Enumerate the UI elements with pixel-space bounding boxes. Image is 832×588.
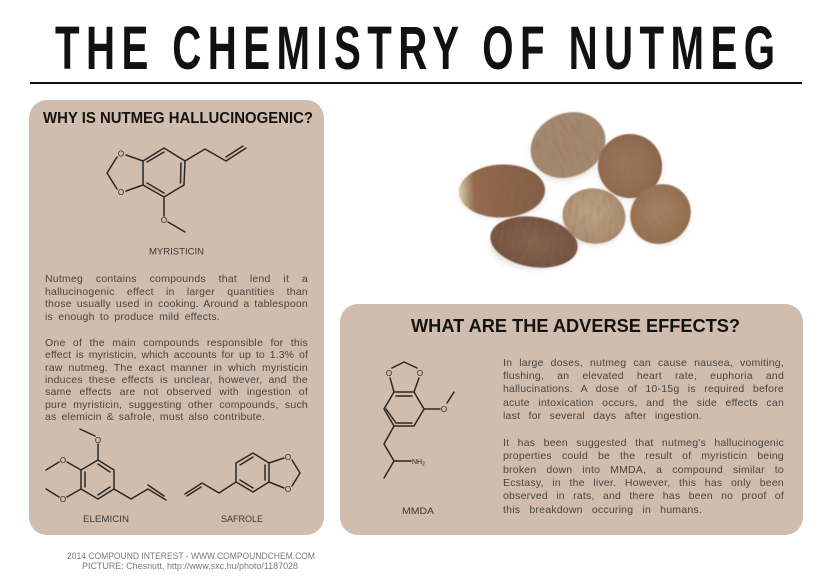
text block: compounds paragraph: One of the main compounds responsible for this — [45, 336, 308, 348]
text block: intro paragraph: those usually used in cooking. Around a tablespoon — [45, 298, 308, 310]
text block: MMDA paragraph: properties could be the result of myristicin being — [503, 450, 784, 462]
text block: compounds paragraph: effect is myristicin, which accounts for up to 1.3% of — [45, 349, 308, 361]
text block: intro paragraph — [45, 272, 311, 324]
molecule: safrole — [185, 453, 300, 496]
title rule — [30, 82, 802, 84]
text block: MMDA paragraph — [503, 436, 787, 518]
molecule: elemicin: O — [60, 456, 66, 465]
text block: compounds paragraph — [45, 336, 311, 426]
nut: lower right — [618, 172, 703, 256]
title: THE CHEMISTRY OF NUTMEG — [55, 14, 775, 82]
molecule: myristicin: O — [118, 188, 124, 197]
panel background — [340, 304, 803, 535]
molecule: elemicin — [46, 429, 166, 504]
text block: effects paragraph: acute intoxication occurs, and the side effects can — [503, 396, 784, 408]
molecule: safrole: O — [285, 453, 291, 462]
label: myristicin: MYRISTICIN — [149, 246, 204, 258]
molecule: elemicin: O — [95, 436, 101, 445]
text block: effects paragraph: In large doses, nutmeg can cause nausea, vomiting, — [503, 356, 784, 368]
molecule: MMDA: O — [417, 369, 423, 378]
text block: compounds paragraph: raw nutmeg. The exact manner in which myristicin — [45, 362, 308, 374]
text block: intro paragraph: is enough to produce mild effects. — [45, 311, 220, 323]
text block: MMDA paragraph: It has been suggested that nutmeg's hallucinogenic — [503, 436, 784, 448]
molecule: MMDA: 2 — [422, 462, 425, 468]
panel: adverse effects — [340, 304, 803, 535]
molecule: MMDA: O — [441, 405, 447, 414]
text block: MMDA paragraph: this breakdown occuring in humans. — [503, 504, 702, 516]
text block: intro paragraph: Nutmeg contains compounds that lend it a — [45, 273, 308, 285]
molecule: safrole: O — [285, 485, 291, 494]
text block: intro paragraph: hallucinogenic effect in larger quantities than — [45, 286, 308, 298]
nut shadows — [459, 103, 690, 269]
molecule: elemicin: O — [60, 495, 66, 504]
heading: WHY IS NUTMEG HALLUCINOGENIC? — [43, 110, 313, 127]
nut: upper right — [591, 127, 669, 205]
nut: middle — [558, 183, 630, 249]
footer credits — [67, 551, 315, 571]
nut: left — [458, 163, 546, 219]
molecule: MMDA — [384, 362, 454, 478]
label: MMDA: MMDA — [402, 506, 435, 517]
text block: MMDA paragraph: broken down into MMDA, a compound similar to — [503, 464, 784, 476]
molecule: MMDA: O — [386, 369, 392, 378]
molecule: myristicin — [107, 146, 246, 232]
molecule: myristicin: O — [161, 216, 167, 225]
footer credits: PICTURE: Chesnutt, http://www.sxc.hu/photo/1187028 — [82, 561, 298, 571]
label: safrole: SAFROLE — [221, 514, 263, 525]
text block: MMDA paragraph: observed in rats, and there has been no proof of — [503, 490, 784, 502]
panel background — [29, 100, 324, 535]
footer credits: 2014 COMPOUND INTEREST - WWW.COMPOUNDCHEM.COM — [67, 551, 315, 561]
panel: why is nutmeg hallucinogenic — [29, 100, 324, 535]
nut: top — [520, 100, 616, 190]
text block: compounds paragraph: same effects are not observed with ingestion of — [45, 386, 308, 398]
photo: nutmeg seeds — [458, 100, 703, 274]
molecule: myristicin: O — [118, 150, 124, 158]
text block: effects paragraph — [503, 356, 787, 424]
label: elemicin: ELEMICIN — [83, 514, 129, 525]
text block: compounds paragraph: induces these effects is unclear, however, and the — [45, 374, 308, 386]
text block: effects paragraph: hallucinations. A dose of 10-15g is required before — [503, 383, 784, 395]
heading: WHAT ARE THE ADVERSE EFFECTS? — [411, 316, 740, 336]
text block: compounds paragraph: as elemicin & safrole, must also contribute. — [45, 411, 265, 423]
molecule: MMDA: NH — [412, 459, 422, 466]
text block: compounds paragraph: pure myristicin, suggesting other compounds, such — [45, 398, 308, 410]
text block: effects paragraph: flushing, an elevated heart rate, euphoria and — [503, 370, 784, 382]
nut: lower left — [487, 210, 581, 274]
text block: effects paragraph: last for several days after ingestion. — [503, 410, 702, 422]
text block: MMDA paragraph: Ecstasy, in the liver. However, this has only been — [503, 477, 784, 489]
